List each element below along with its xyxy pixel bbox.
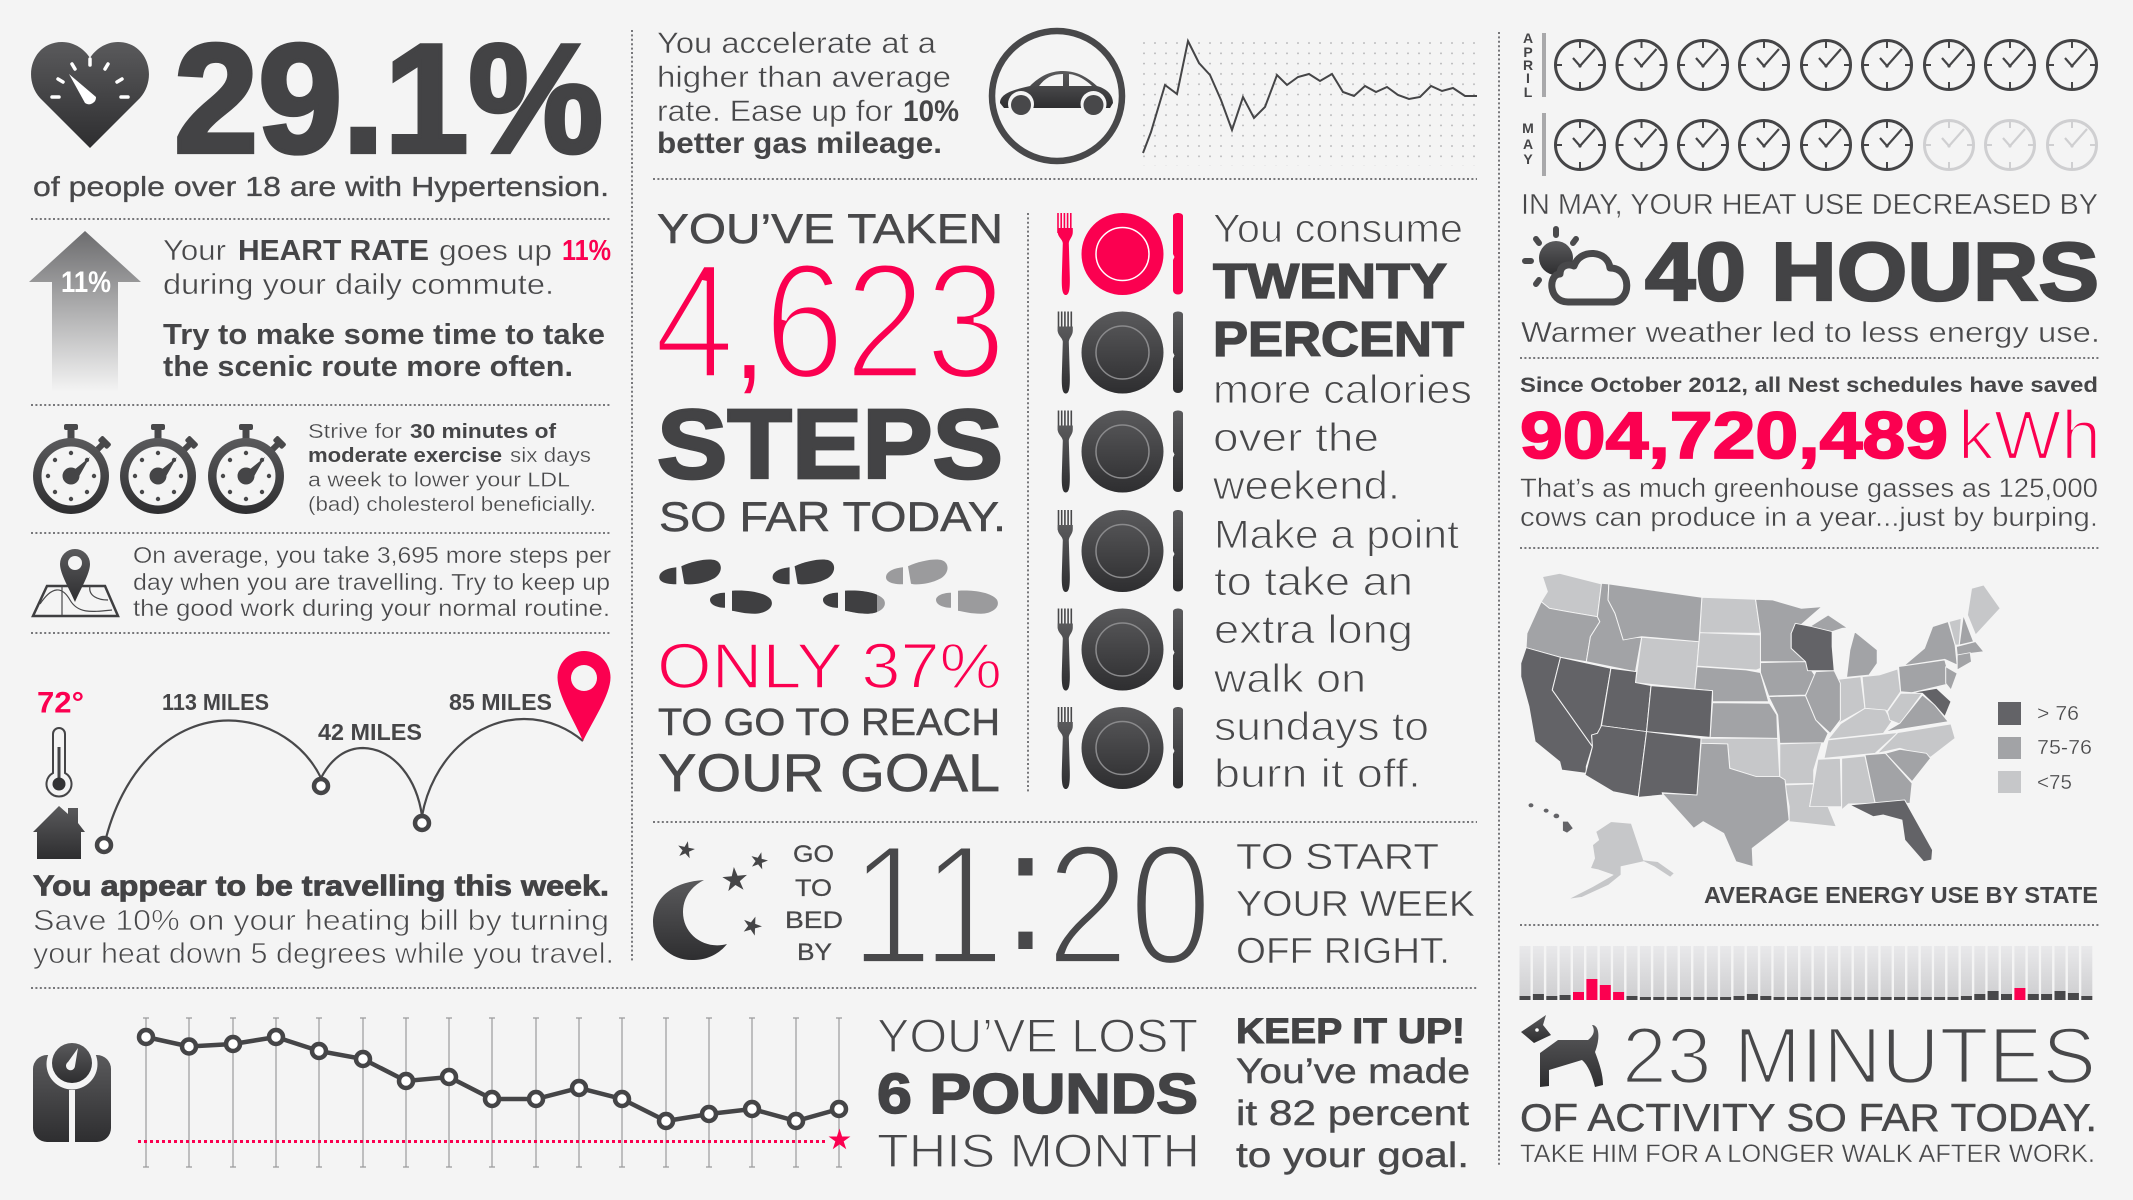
- text block: On average, you take 3,695 more steps per: [133, 542, 611, 568]
- april row: [1523, 30, 2096, 100]
- text block: a week to lower your LDL: [308, 470, 570, 492]
- hours value: 40 HOURS: [1645, 225, 2099, 318]
- icons: dark plates: [1058, 312, 1183, 789]
- text block: burn it off.: [1214, 752, 1421, 796]
- text block: (bad) cholesterol beneficially.: [308, 494, 596, 516]
- temperature label: 72°: [37, 686, 84, 720]
- panel: acceleration: [657, 27, 1477, 166]
- may row: [1522, 113, 2096, 176]
- savings value: 904,720,489: [1520, 398, 1948, 472]
- panel: nest savings: [1520, 374, 2101, 532]
- mile labels: 85 MILES: [449, 689, 552, 715]
- text block: the good work during your normal routine.: [133, 595, 610, 621]
- text block: You consume: [1213, 207, 1463, 251]
- text block: 30 minutes of: [410, 421, 556, 443]
- bedtime clock value: 20: [1046, 809, 1212, 1001]
- text block: sundays to: [1214, 705, 1429, 749]
- text block: [133, 542, 611, 621]
- weight heading: YOU’VE LOST: [877, 1009, 1198, 1062]
- text block: to take an: [1214, 560, 1413, 604]
- panel: steps when travelling: [33, 542, 611, 621]
- text block: [33, 870, 614, 970]
- bar chart: activity: [1520, 946, 2092, 1000]
- text block: better gas mileage.: [657, 127, 942, 160]
- advice line: TAKE HIM FOR A LONGER WALK AFTER WORK.: [1520, 1140, 2095, 1168]
- comparison text: cows can produce in a year...just by burping.: [1520, 502, 2098, 532]
- comparison text: [1520, 473, 2098, 532]
- icon: moon and stars: [653, 839, 770, 960]
- panel: heart rate: [29, 231, 611, 392]
- encouragement text: to your goal.: [1236, 1136, 1469, 1175]
- text block: 10%: [903, 95, 959, 128]
- text block: [657, 27, 959, 160]
- activity line: OF ACTIVITY SO FAR TODAY.: [1520, 1097, 2097, 1140]
- bedtime clock value: :: [1005, 794, 1046, 986]
- text block: Make a point: [1214, 513, 1459, 557]
- unit: kWh: [1958, 396, 2101, 474]
- go to bed by: TO: [795, 875, 832, 902]
- caption: of people over 18 are with Hypertension.: [33, 171, 609, 202]
- text block: weekend.: [1212, 464, 1400, 508]
- map legend: 75-76: [2037, 737, 2092, 759]
- april row: L: [1524, 84, 1533, 100]
- panel: weight: [33, 1009, 1470, 1177]
- icon: thermometer: [46, 728, 71, 796]
- map: US states: [1521, 573, 2000, 899]
- icon: destination pin: [558, 651, 610, 741]
- encouragement text: [1236, 1012, 1470, 1175]
- heading: YOU’VE TAKEN: [657, 205, 1003, 252]
- text block: day when you are travelling. Try to keep up: [133, 569, 610, 595]
- april row: P: [1523, 44, 1533, 60]
- text block: 11%: [562, 235, 611, 267]
- text block: the scenic route more often.: [163, 351, 573, 383]
- text block: moderate exercise: [308, 445, 502, 467]
- weight heading: THIS MONTH: [877, 1124, 1200, 1177]
- text block: You accelerate at a: [657, 27, 936, 60]
- april row: R: [1523, 57, 1533, 73]
- may row: A: [1523, 136, 1533, 152]
- go to bed by: [785, 841, 843, 966]
- icon: up arrow 11%: [29, 231, 141, 392]
- text block: Strive for: [308, 421, 402, 443]
- text block: HEART RATE: [238, 235, 429, 267]
- panel: travel route: [33, 651, 614, 970]
- text block: Try to make some time to take: [163, 319, 605, 351]
- panel: hypertension: [31, 12, 609, 202]
- closing text: TO START: [1236, 836, 1439, 877]
- encouragement text: You’ve made: [1236, 1052, 1470, 1091]
- encouragement text: KEEP IT UP!: [1236, 1012, 1465, 1051]
- text block: six days: [510, 445, 591, 467]
- goal remaining: TO GO TO REACH: [658, 702, 1000, 744]
- text block: goes up: [439, 235, 552, 267]
- closing text: [1236, 836, 1475, 971]
- route arcs: [106, 719, 583, 838]
- comparison text: That’s as much greenhouse gasses as 125,000: [1520, 473, 2098, 503]
- bedtime clock value: 11: [850, 809, 1029, 1001]
- steps label: STEPS: [657, 389, 1003, 499]
- text block: [163, 235, 611, 383]
- text block: [1212, 207, 1472, 796]
- may row: M: [1522, 120, 1534, 136]
- panel: steps: [654, 205, 1006, 803]
- minutes value: 23 MINUTES: [1622, 1011, 2096, 1100]
- go to bed by: GO: [793, 841, 834, 868]
- icon: stopwatches: [33, 424, 287, 514]
- icon: heart gauge: [31, 42, 149, 148]
- icon: sun and cloud: [1525, 229, 1627, 302]
- big percentage: 29.1%: [174, 12, 603, 185]
- panel: heat use clocks: [1521, 30, 2100, 349]
- text block: higher than average: [657, 61, 951, 94]
- text block: your heat down 5 degrees while you travel.: [33, 938, 614, 970]
- line chart: weight: [138, 1018, 850, 1167]
- april row: I: [1526, 70, 1530, 86]
- panel: calories: [1058, 207, 1472, 796]
- text block: extra long: [1214, 608, 1413, 652]
- icon: car in circle: [992, 31, 1122, 161]
- go to bed by: BED: [785, 907, 843, 934]
- text block: TWENTY: [1213, 255, 1447, 309]
- mile labels: [162, 689, 552, 745]
- goal remaining: YOUR GOAL: [658, 744, 1000, 803]
- mile labels: 113 MILES: [162, 689, 269, 715]
- text block: more calories: [1213, 368, 1472, 412]
- text block: PERCENT: [1213, 313, 1464, 367]
- icon: footprints: [659, 560, 998, 614]
- text block: Save 10% on your heating bill by turning: [33, 905, 609, 937]
- step count: 4,623: [654, 229, 1006, 413]
- so far today: SO FAR TODAY.: [659, 493, 1006, 540]
- text block: [308, 421, 596, 516]
- intro: Since October 2012, all Nest schedules have saved: [1520, 374, 2098, 397]
- icon: pink plate: [1058, 213, 1183, 295]
- go to bed by: BY: [797, 939, 832, 966]
- heat use heading: IN MAY, YOUR HEAT USE DECREASED BY: [1521, 189, 2098, 221]
- note: Warmer weather led to less energy use.: [1521, 317, 2100, 349]
- goal remaining: [657, 630, 1002, 803]
- weight heading: 6 POUNDS: [877, 1062, 1198, 1126]
- panel: energy map: [1521, 573, 2098, 908]
- panel: dog activity: [1520, 946, 2097, 1168]
- icon: scale: [33, 1038, 111, 1142]
- icon: dog: [1521, 1015, 1603, 1087]
- closing text: OFF RIGHT.: [1236, 930, 1450, 971]
- closing text: YOUR WEEK: [1236, 883, 1475, 924]
- line chart: acceleration: [1143, 41, 1477, 166]
- weight heading: [877, 1009, 1200, 1177]
- map legend: > 76: [2037, 703, 2079, 725]
- encouragement text: it 82 percent: [1236, 1094, 1469, 1133]
- map legend: [1998, 702, 2092, 794]
- goal remaining: ONLY 37%: [657, 630, 1002, 702]
- map caption: AVERAGE ENERGY USE BY STATE: [1704, 882, 2098, 908]
- icon: map pin: [33, 549, 118, 616]
- text block: walk on: [1213, 657, 1366, 701]
- text block: during your daily commute.: [163, 269, 554, 301]
- may row: Y: [1523, 151, 1533, 167]
- map legend: <75: [2037, 772, 2072, 794]
- text block: rate. Ease up for: [657, 95, 893, 128]
- mile labels: 42 MILES: [318, 719, 422, 745]
- text block: over the: [1213, 416, 1379, 460]
- icon: house: [33, 806, 85, 859]
- panel: exercise: [33, 421, 596, 516]
- april row: A: [1523, 30, 1533, 46]
- route stops: [97, 779, 429, 852]
- panel: bedtime: [653, 794, 1475, 1001]
- text block: Your: [163, 235, 226, 267]
- text block: You appear to be travelling this week.: [33, 870, 609, 902]
- icon: up arrow 11%: 11%: [61, 266, 111, 299]
